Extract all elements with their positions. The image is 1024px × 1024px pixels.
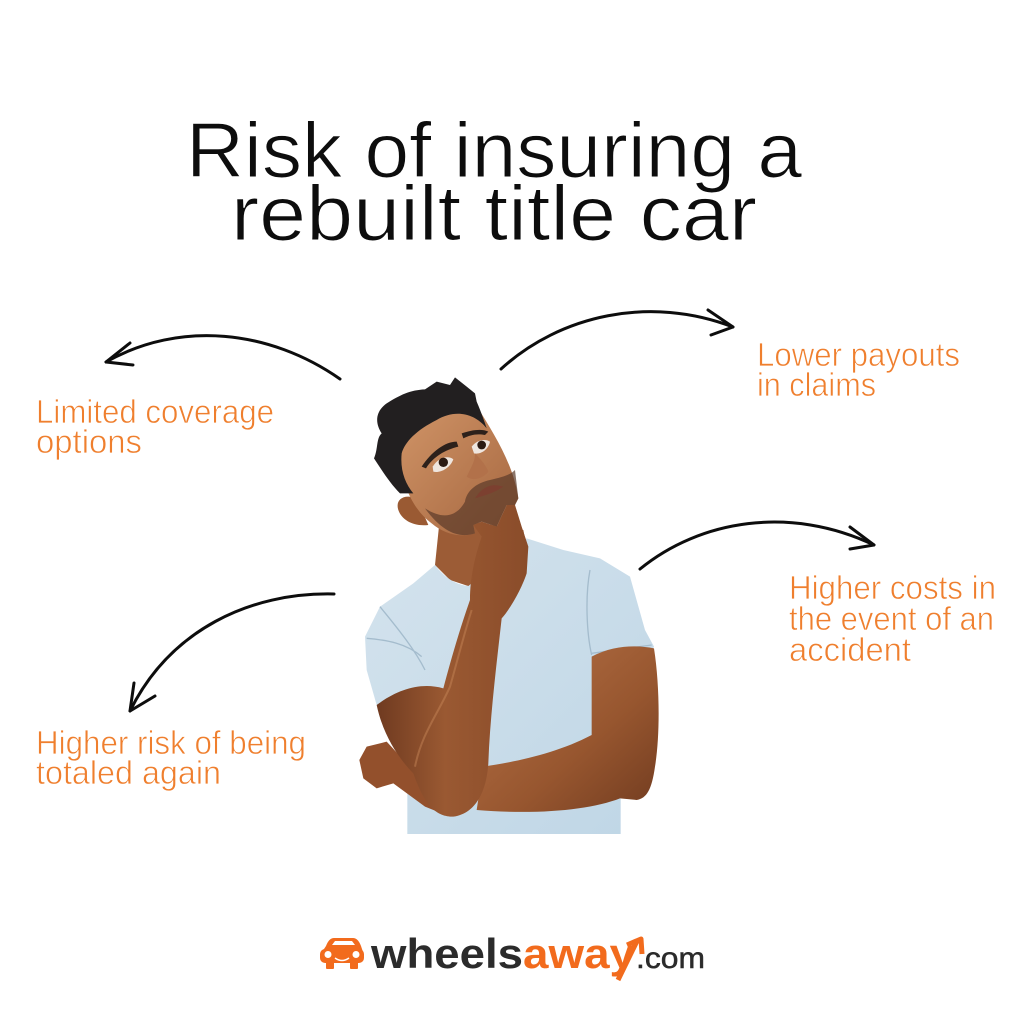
right arm and forearm bbox=[477, 646, 659, 812]
head bbox=[400, 406, 518, 535]
back arm and fist bbox=[359, 742, 450, 817]
logo: wheelsaway.com bbox=[320, 930, 705, 980]
title: Risk of insuring a bbox=[186, 106, 803, 194]
title: rebuilt title car bbox=[231, 169, 757, 257]
text: lower payouts in claims: Lower payouts bbox=[757, 336, 960, 373]
arrow: to higher costs bbox=[640, 522, 874, 569]
nose bbox=[467, 453, 488, 479]
eyes bbox=[433, 457, 453, 472]
text: higher costs in the event of an accident: the event of an bbox=[789, 600, 994, 637]
text: higher costs in the event of an accident: accident bbox=[789, 631, 911, 668]
title bbox=[186, 106, 803, 257]
logo wordmark: away: away bbox=[523, 930, 636, 977]
text: limited coverage options: options bbox=[36, 423, 142, 460]
text: higher risk of being totaled again: Higher risk of being bbox=[36, 724, 306, 761]
shirt fold shading bbox=[367, 570, 652, 670]
illustration: thinking man bbox=[359, 377, 659, 834]
text: lower payouts in claims: in claims bbox=[757, 366, 876, 403]
eyebrows bbox=[422, 430, 488, 468]
neck bbox=[435, 517, 528, 587]
beard bbox=[425, 470, 518, 535]
text: higher risk of being totaled again: totaled again bbox=[36, 754, 221, 791]
text: limited coverage options: Limited coverage bbox=[36, 393, 274, 430]
text: higher costs in the event of an accident bbox=[789, 569, 996, 668]
hair bbox=[374, 377, 487, 493]
icon: car bbox=[320, 938, 364, 969]
raised arm and hand bbox=[377, 505, 528, 817]
arrow: to limited coverage bbox=[106, 336, 340, 379]
arrow: to higher risk bbox=[130, 594, 334, 711]
arm highlight bbox=[415, 610, 472, 767]
text: lower payouts in claims bbox=[757, 336, 960, 403]
ear bbox=[398, 497, 428, 525]
text: higher costs in the event of an accident: Higher costs in bbox=[789, 569, 996, 606]
text: limited coverage options bbox=[36, 393, 274, 460]
logo wordmark: wheels: wheels bbox=[370, 930, 523, 977]
logo arrow bbox=[618, 939, 642, 980]
lips bbox=[475, 485, 503, 498]
t-shirt bbox=[365, 538, 654, 834]
text: higher risk of being totaled again bbox=[36, 724, 306, 791]
logo wordmark: .com: .com bbox=[636, 942, 705, 975]
arrow: to lower payouts bbox=[501, 310, 733, 369]
